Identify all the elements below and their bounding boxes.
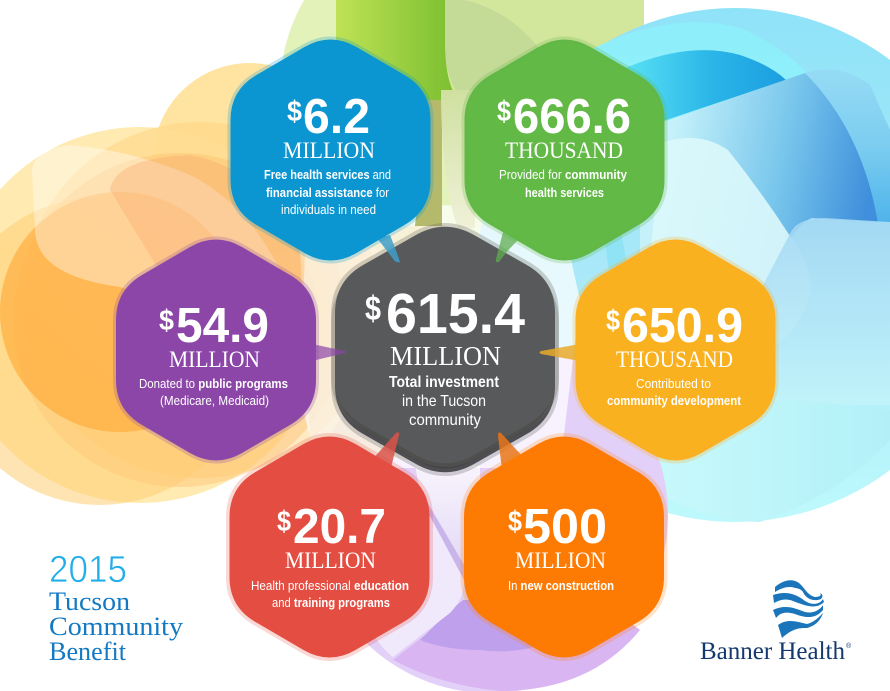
amount: 500: $ <box>508 506 522 538</box>
unit: million: MILLION <box>283 138 375 163</box>
description: total investment <box>389 374 500 429</box>
hexagon: public programs <box>116 240 316 460</box>
arrow: green to centre <box>496 232 518 262</box>
description: public programs <box>139 377 288 408</box>
arrow: blue to centre <box>377 235 400 262</box>
background: blue circles <box>478 8 890 522</box>
amount: 6.2: $ <box>287 96 302 128</box>
title: 2015 Tucson Community Benefit <box>49 549 183 666</box>
logo: Banner Health: ® <box>846 642 852 650</box>
amount: 666.6: 666.6 <box>513 90 631 144</box>
background: orange circles <box>0 63 378 505</box>
amount: 615.4: $ <box>365 290 381 328</box>
unit: thousand: THOUSAND <box>505 138 623 163</box>
description: free health services <box>264 168 391 217</box>
amount: 20.7: $ <box>277 506 291 538</box>
description: community health: Provided for community <box>499 168 627 182</box>
unit: million: MILLION <box>515 548 606 573</box>
description: free health services: individuals in need <box>281 203 376 217</box>
description: community development <box>607 377 742 408</box>
unit: million: MILLION <box>169 347 260 372</box>
amount: 20.7: 20.7 <box>293 500 386 554</box>
logo: Banner Health: Banner Health <box>700 638 845 665</box>
arrow: yellow to centre <box>540 344 580 361</box>
description: community health: health services <box>525 186 604 200</box>
title: 2015 Tucson Community Benefit: Community <box>49 612 183 641</box>
description: community development: community development <box>607 394 742 408</box>
unit: thousand: THOUSAND <box>616 347 733 372</box>
arrow: orange to centre <box>498 432 524 470</box>
arrow: purple to centre <box>312 344 346 361</box>
amount: 500: 500 <box>523 500 607 554</box>
icon: banner heart <box>773 580 824 638</box>
amount: 6.2: 6.2 <box>303 90 370 144</box>
amount: 54.9: 54.9 <box>176 299 269 353</box>
title: 2015 Tucson Community Benefit: Tucson <box>49 587 130 616</box>
unit: million: MILLION <box>390 341 501 371</box>
description: free health services: Free health services and <box>264 168 391 182</box>
arrow: red to centre <box>370 432 399 472</box>
hexagon: community development <box>576 240 776 460</box>
amount: 650.9: $ <box>606 305 620 337</box>
amount: 615.4: 615.4 <box>386 282 525 346</box>
description: community development: Contributed to <box>636 377 711 391</box>
description: total investment: community <box>409 412 481 429</box>
unit: million: MILLION <box>285 548 376 573</box>
amount: 666.6: $ <box>497 96 511 128</box>
description: public programs: (Medicare, Medicaid) <box>160 394 269 408</box>
hexagon: community health services <box>464 40 664 260</box>
hexagon: professional education <box>230 436 430 658</box>
description: public programs: Donated to public programs <box>139 377 288 391</box>
description: total investment: in the Tucson <box>402 393 486 410</box>
background: green lobes <box>280 0 644 270</box>
description: free health services: financial assistance for <box>266 186 389 200</box>
description: education and training <box>251 579 409 610</box>
description: education and training: Health professional education <box>251 579 409 593</box>
background: pale centre shape <box>300 90 580 468</box>
title: 2015 Tucson Community Benefit: Benefit <box>49 637 127 666</box>
logo: Banner Health <box>700 580 852 665</box>
description: total investment: Total investment <box>389 374 500 391</box>
hexagon: free health services <box>230 40 430 260</box>
hexagon: centre total investment <box>335 227 555 472</box>
description: education and training: and training programs <box>272 596 390 610</box>
hexagon: new construction <box>464 436 664 658</box>
background: purple circle <box>312 337 668 691</box>
description: community health <box>499 168 627 200</box>
title: 2015 Tucson Community Benefit: 2015 <box>49 549 127 591</box>
amount: 54.9: $ <box>159 305 174 337</box>
description: new construction: In new construction <box>508 579 614 593</box>
amount: 650.9: 650.9 <box>622 299 743 353</box>
